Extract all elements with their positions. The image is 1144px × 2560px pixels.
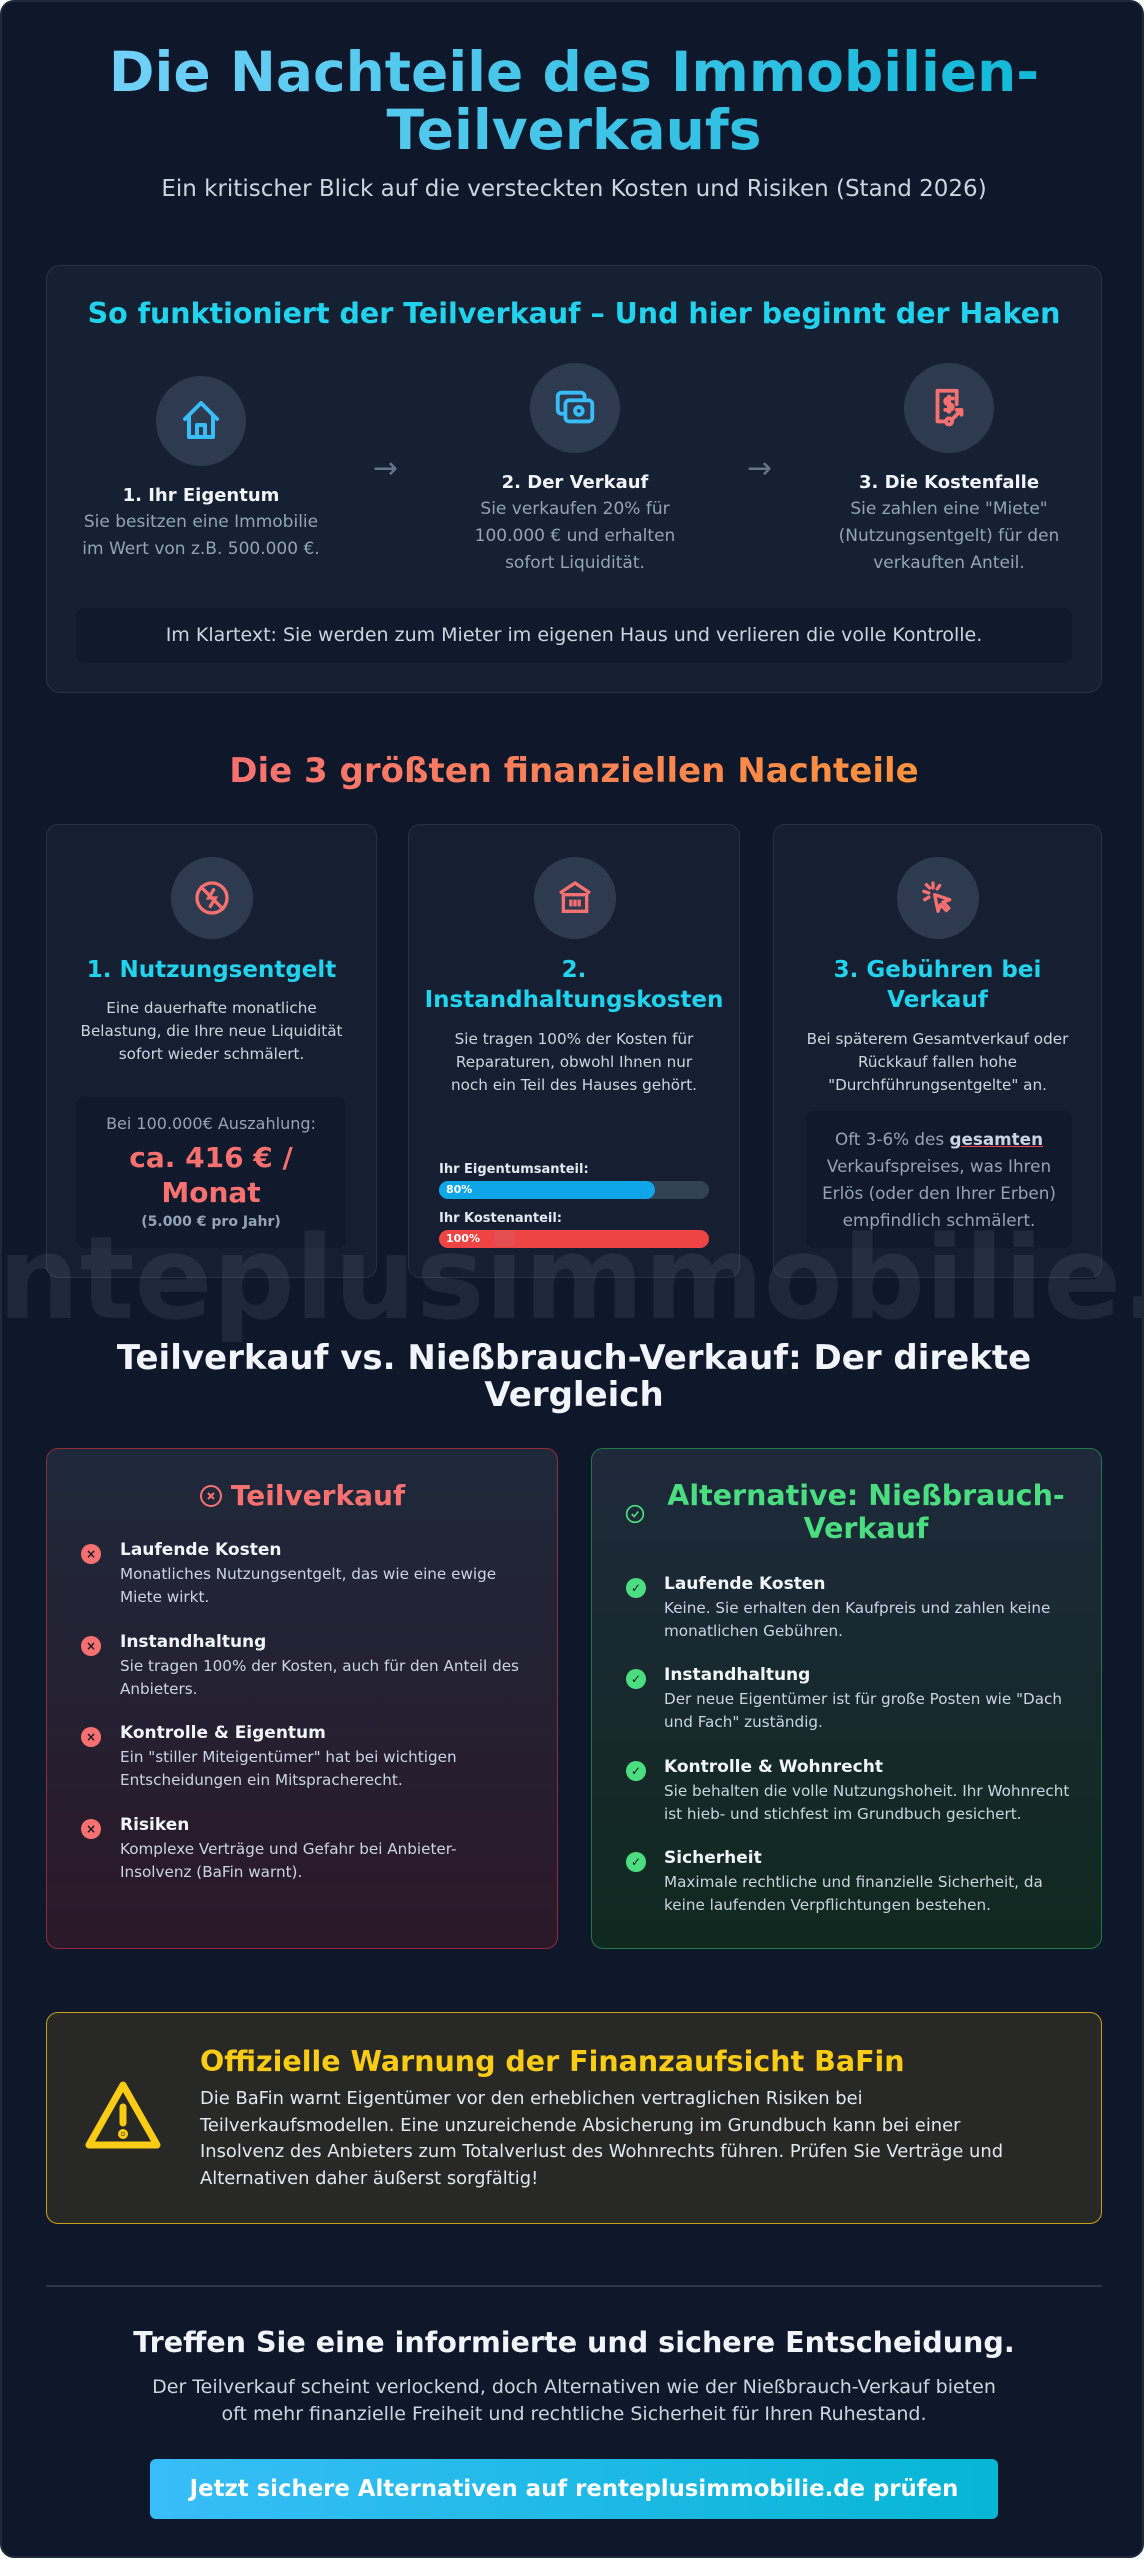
card text: "Durchführungsentgelte" an. [828, 1076, 1047, 1094]
card text: Bei späterem Gesamtverkauf oder [807, 1030, 1068, 1048]
step 2: 2. Der Verkauf [502, 472, 648, 493]
closing text: Der Teilverkauf scheint verlockend, doch Alternativen wie der Nießbrauch-Verkauf bieten [152, 2376, 996, 2398]
icon: x [81, 1636, 101, 1656]
icon: x: × [86, 1822, 96, 1836]
icon: no money [171, 857, 253, 939]
step 2: sofort Liquidität. [505, 553, 645, 573]
item: ist hieb- und stichfest im Grundbuch gesichert. [664, 1805, 1022, 1823]
item [120, 1815, 457, 1881]
icon: check circle [626, 1504, 644, 1524]
subtitle: Ein kritischer Blick auf die versteckten Kosten und Risiken (Stand 2026) [161, 176, 987, 202]
card text: noch ein Teil des Hauses gehört. [451, 1076, 697, 1094]
item: Miete wirkt. [120, 1588, 209, 1606]
icon: warning triangle [86, 2082, 160, 2148]
callout: monthly cost [76, 1097, 346, 1248]
item [120, 1632, 519, 1698]
panel: Nießbrauch [591, 1448, 1102, 1949]
step 2 [475, 472, 675, 573]
card text [451, 1030, 697, 1094]
card title [425, 957, 723, 1013]
callout: monthly cost: Monat [161, 1176, 261, 1209]
card text: Sie tragen 100% der Kosten für [455, 1030, 693, 1048]
icon: check: ✓ [631, 1581, 641, 1595]
title: Die Nachteile des Immobilien- [109, 40, 1039, 104]
callout: monthly cost: Bei 100.000€ Auszahlung: [106, 1114, 316, 1133]
icon: x [81, 1727, 101, 1747]
item: Sie behalten die volle Nutzungshoheit. Ihr Wohnrecht [664, 1782, 1069, 1800]
icon: document dollar [904, 363, 994, 453]
item: Sie tragen 100% der Kosten, auch für den Anteil des [120, 1657, 519, 1675]
button: Jetzt sichere Alternativen auf renteplusimmobilie.de prüfen [190, 2476, 958, 2502]
step 3 [839, 472, 1059, 573]
bar chart: ownership vs cost: 100% [446, 1232, 480, 1245]
item: Kontrolle & Eigentum [120, 1723, 326, 1743]
icon: cash [530, 363, 620, 453]
item: Monatliches Nutzungsentgelt, das wie eine ewige [120, 1565, 496, 1583]
warning text: Teilverkaufsmodellen. Eine unzureichende Absicherung im Grundbuch kann bei einer [200, 2115, 960, 2136]
item: Kontrolle & Wohnrecht [664, 1757, 883, 1777]
step 1: 1. Ihr Eigentum [123, 485, 279, 506]
step 1: im Wert von z.B. 500.000 €. [82, 539, 320, 559]
callout: monthly cost: ca. 416 € / [129, 1141, 293, 1174]
item [664, 1665, 1062, 1731]
bar chart: ownership vs cost: 80% [446, 1183, 472, 1196]
item: und Fach" zuständig. [664, 1713, 823, 1731]
heading [667, 1479, 1065, 1545]
icon: check: ✓ [631, 1672, 641, 1686]
warning text [200, 2088, 1003, 2189]
icon: check: ✓ [631, 1855, 641, 1869]
callout: fees: empfindlich schmälert. [843, 1210, 1035, 1230]
title: Teilverkaufs [386, 98, 762, 162]
card title: 3. Gebühren bei [834, 957, 1041, 983]
item: Sicherheit [664, 1848, 762, 1868]
item [120, 1723, 457, 1789]
closing text: oft mehr finanzielle Freiheit und rechtliche Sicherheit für Ihren Ruhestand. [221, 2403, 926, 2425]
item: Entscheidungen ein Mitspracherecht. [120, 1771, 403, 1789]
bar chart: ownership vs cost: Ihr Eigentumsanteil: [439, 1162, 589, 1177]
panel heading: So funktioniert der Teilverkauf – Und hier beginnt der Haken [88, 297, 1060, 330]
button [150, 2459, 998, 2519]
arrow: → [747, 451, 772, 486]
item [120, 1540, 496, 1606]
panel: card 2 Instandhaltung [408, 824, 740, 1278]
icon: x: × [86, 1547, 96, 1561]
card title: 2. [562, 957, 586, 983]
card title: Verkauf [887, 987, 988, 1013]
callout: fees [806, 1111, 1072, 1248]
callout: monthly cost: (5.000 € pro Jahr) [141, 1214, 281, 1230]
heading: Alternative: Nießbrauch- [667, 1479, 1065, 1512]
item: Instandhaltung [664, 1665, 810, 1685]
icon: house [156, 376, 246, 466]
item: Laufende Kosten [664, 1574, 825, 1594]
item [664, 1757, 1069, 1823]
item: Maximale rechtliche und finanzielle Sicherheit, da [664, 1873, 1043, 1891]
icon: x [81, 1544, 101, 1564]
closing heading: Treffen Sie eine informierte und sichere Entscheidung. [133, 2325, 1015, 2359]
item: Risiken [120, 1815, 189, 1835]
callout: klartext: Im Klartext: Sie werden zum Mieter im eigenen Haus und verlieren die volle Kontrolle. [166, 624, 982, 646]
section heading: comparison: Teilverkauf vs. Nießbrauch-Verkauf: Der direkte [117, 1338, 1031, 1378]
icon: bank [534, 857, 616, 939]
step 3: Sie zahlen eine "Miete" [850, 499, 1048, 519]
item: Instandhaltung [120, 1632, 266, 1652]
title [2, 43, 1144, 159]
callout: klartext [76, 608, 1072, 663]
icon: check [626, 1852, 646, 1872]
step 2: 100.000 € und erhalten [475, 526, 675, 546]
icon: x: × [86, 1730, 96, 1744]
item: Ein "stiller Miteigentümer" hat bei wichtigen [120, 1748, 457, 1766]
icon: check [626, 1669, 646, 1689]
warning text: Insolvenz des Anbieters zum Totalverlust des Wohnrechts führen. Prüfen Sie Verträge und [200, 2141, 1003, 2162]
arrow: → [373, 451, 398, 486]
item: Keine. Sie erhalten den Kaufpreis und zahlen keine [664, 1599, 1050, 1617]
warning heading: Offizielle Warnung der Finanzaufsicht BaFin [200, 2045, 905, 2078]
item [664, 1848, 1043, 1914]
heading: Teilverkauf [231, 1479, 405, 1512]
card text: Reparaturen, obwohl Ihnen nur [456, 1053, 692, 1071]
step 1 [82, 485, 320, 559]
section heading: 3 disadvantages: Die 3 größten finanziellen Nachteile [229, 751, 919, 791]
item [664, 1574, 1050, 1640]
panel: Teilverkauf [46, 1448, 558, 1949]
step 3: 3. Die Kostenfalle [859, 472, 1039, 493]
panel: card 1 Nutzungsentgelt [46, 824, 377, 1278]
step 2: Sie verkaufen 20% für [480, 499, 670, 519]
icon: check [626, 1761, 646, 1781]
warning text: Alternativen daher äußerst sorgfältig! [200, 2168, 538, 2189]
item: Insolvenz (BaFin warnt). [120, 1863, 302, 1881]
card text: sofort wieder schmälert. [119, 1045, 304, 1063]
bar chart: ownership vs cost [439, 1162, 709, 1248]
item: Komplexe Verträge und Gefahr bei Anbieter- [120, 1840, 457, 1858]
card title: Instandhaltungskosten [425, 987, 723, 1013]
icon: cursor click [897, 857, 979, 939]
card text [807, 1030, 1068, 1094]
bar chart: ownership vs cost: Ihr Kostenanteil: [439, 1211, 562, 1226]
icon: x: × [86, 1639, 96, 1653]
step 3: (Nutzungsentgelt) für den [839, 526, 1059, 546]
icon: x [81, 1819, 101, 1839]
section heading: comparison [117, 1338, 1031, 1415]
card text: Rückkauf fallen hohe [858, 1053, 1017, 1071]
panel: card 3 Gebühren [773, 824, 1102, 1278]
item: Laufende Kosten [120, 1540, 281, 1560]
callout: fees: Verkaufspreises, was Ihren [827, 1156, 1051, 1176]
item: Anbieters. [120, 1680, 198, 1698]
section heading: comparison: Vergleich [484, 1375, 664, 1415]
callout: fees: Erlös (oder den Ihrer Erben) [822, 1183, 1056, 1203]
step 1: Sie besitzen eine Immobilie [84, 512, 318, 532]
panel: BaFin warning [46, 2012, 1102, 2224]
card text: Eine dauerhafte monatliche [106, 999, 317, 1017]
step 3: verkauften Anteil. [873, 553, 1025, 573]
panel: how it works [46, 265, 1102, 693]
item: monatlichen Gebühren. [664, 1622, 843, 1640]
item: Der neue Eigentümer ist für große Posten wie "Dach [664, 1690, 1062, 1708]
card title: 1. Nutzungsentgelt [87, 957, 336, 983]
icon: check: ✓ [631, 1764, 641, 1778]
warning text: Die BaFin warnt Eigentümer vor den erheblichen vertraglichen Risiken bei [200, 2088, 863, 2109]
card title [834, 957, 1041, 1013]
item: keine laufenden Verpflichtungen bestehen. [664, 1896, 991, 1914]
callout: fees: Oft 3-6% des gesamten [835, 1129, 1043, 1149]
closing text [152, 2376, 996, 2425]
card text [81, 999, 342, 1063]
icon: check [626, 1578, 646, 1598]
card text: Belastung, die Ihre neue Liquidität [81, 1022, 342, 1040]
heading: Verkauf [804, 1512, 928, 1545]
